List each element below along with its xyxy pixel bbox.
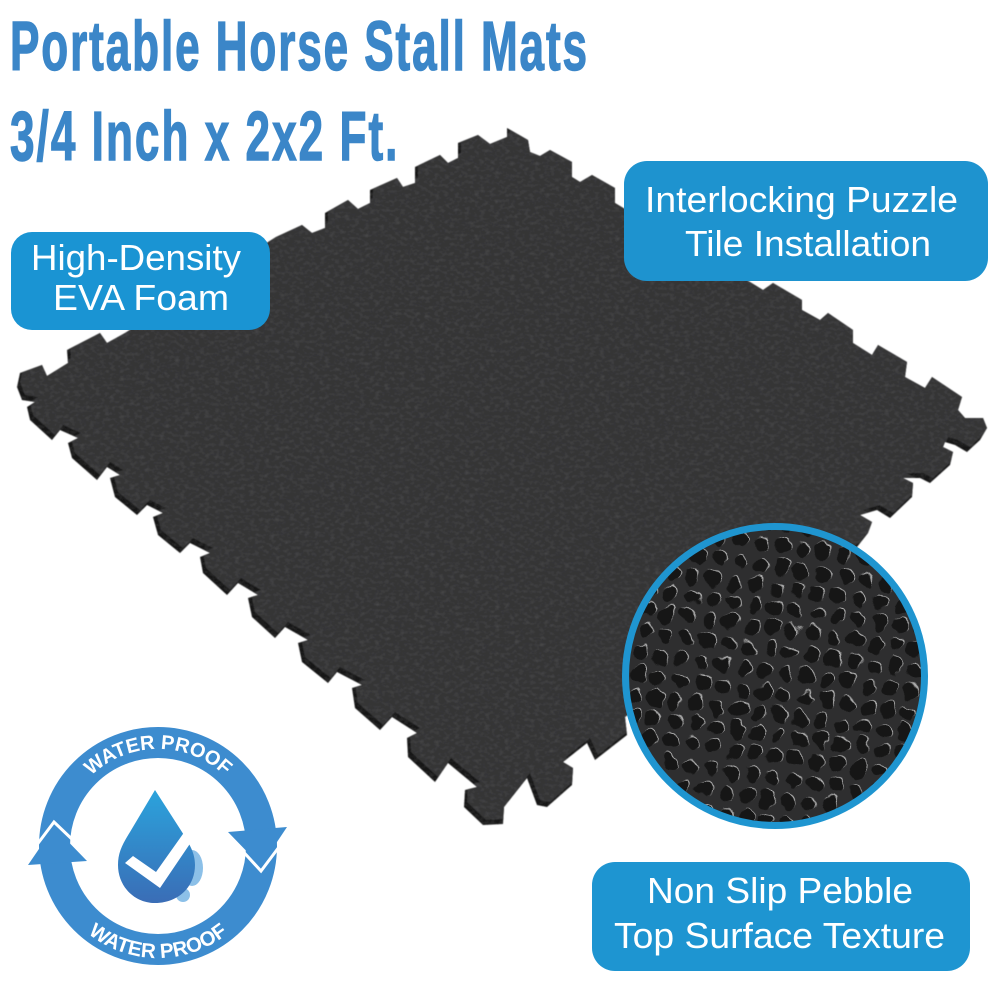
pebble texture magnifier circle [622, 523, 928, 829]
callout: high-density EVA foam [11, 232, 270, 330]
callout: non slip pebble top surface texture: Top Surface Texture [614, 915, 945, 956]
title line 1: Portable Horse Stall Mats [10, 8, 587, 86]
water proof text, bottom arc: WATER PROOF [90, 922, 224, 958]
icon: water drop with check mark [118, 790, 204, 903]
callout: interlocking puzzle tile installation [624, 161, 988, 281]
black puzzle-edge EVA foam mat [0, 120, 1000, 840]
callout: high-density EVA foam: High-Density [31, 237, 241, 278]
title line 2: 3/4 Inch x 2x2 Ft. [10, 98, 397, 176]
callout: high-density EVA foam: EVA Foam [53, 277, 229, 318]
water proof text, top arc: WATER PROOF [82, 735, 234, 774]
callout: non slip pebble top surface texture: Non Slip Pebble [647, 870, 913, 911]
title [10, 8, 587, 176]
callout: interlocking puzzle tile installation: Tile Installation [685, 223, 931, 264]
callout: non slip pebble top surface texture [592, 862, 970, 971]
circular arrow ring [28, 742, 287, 950]
water proof badge [28, 727, 287, 965]
callout: interlocking puzzle tile installation: Interlocking Puzzle [645, 179, 958, 220]
